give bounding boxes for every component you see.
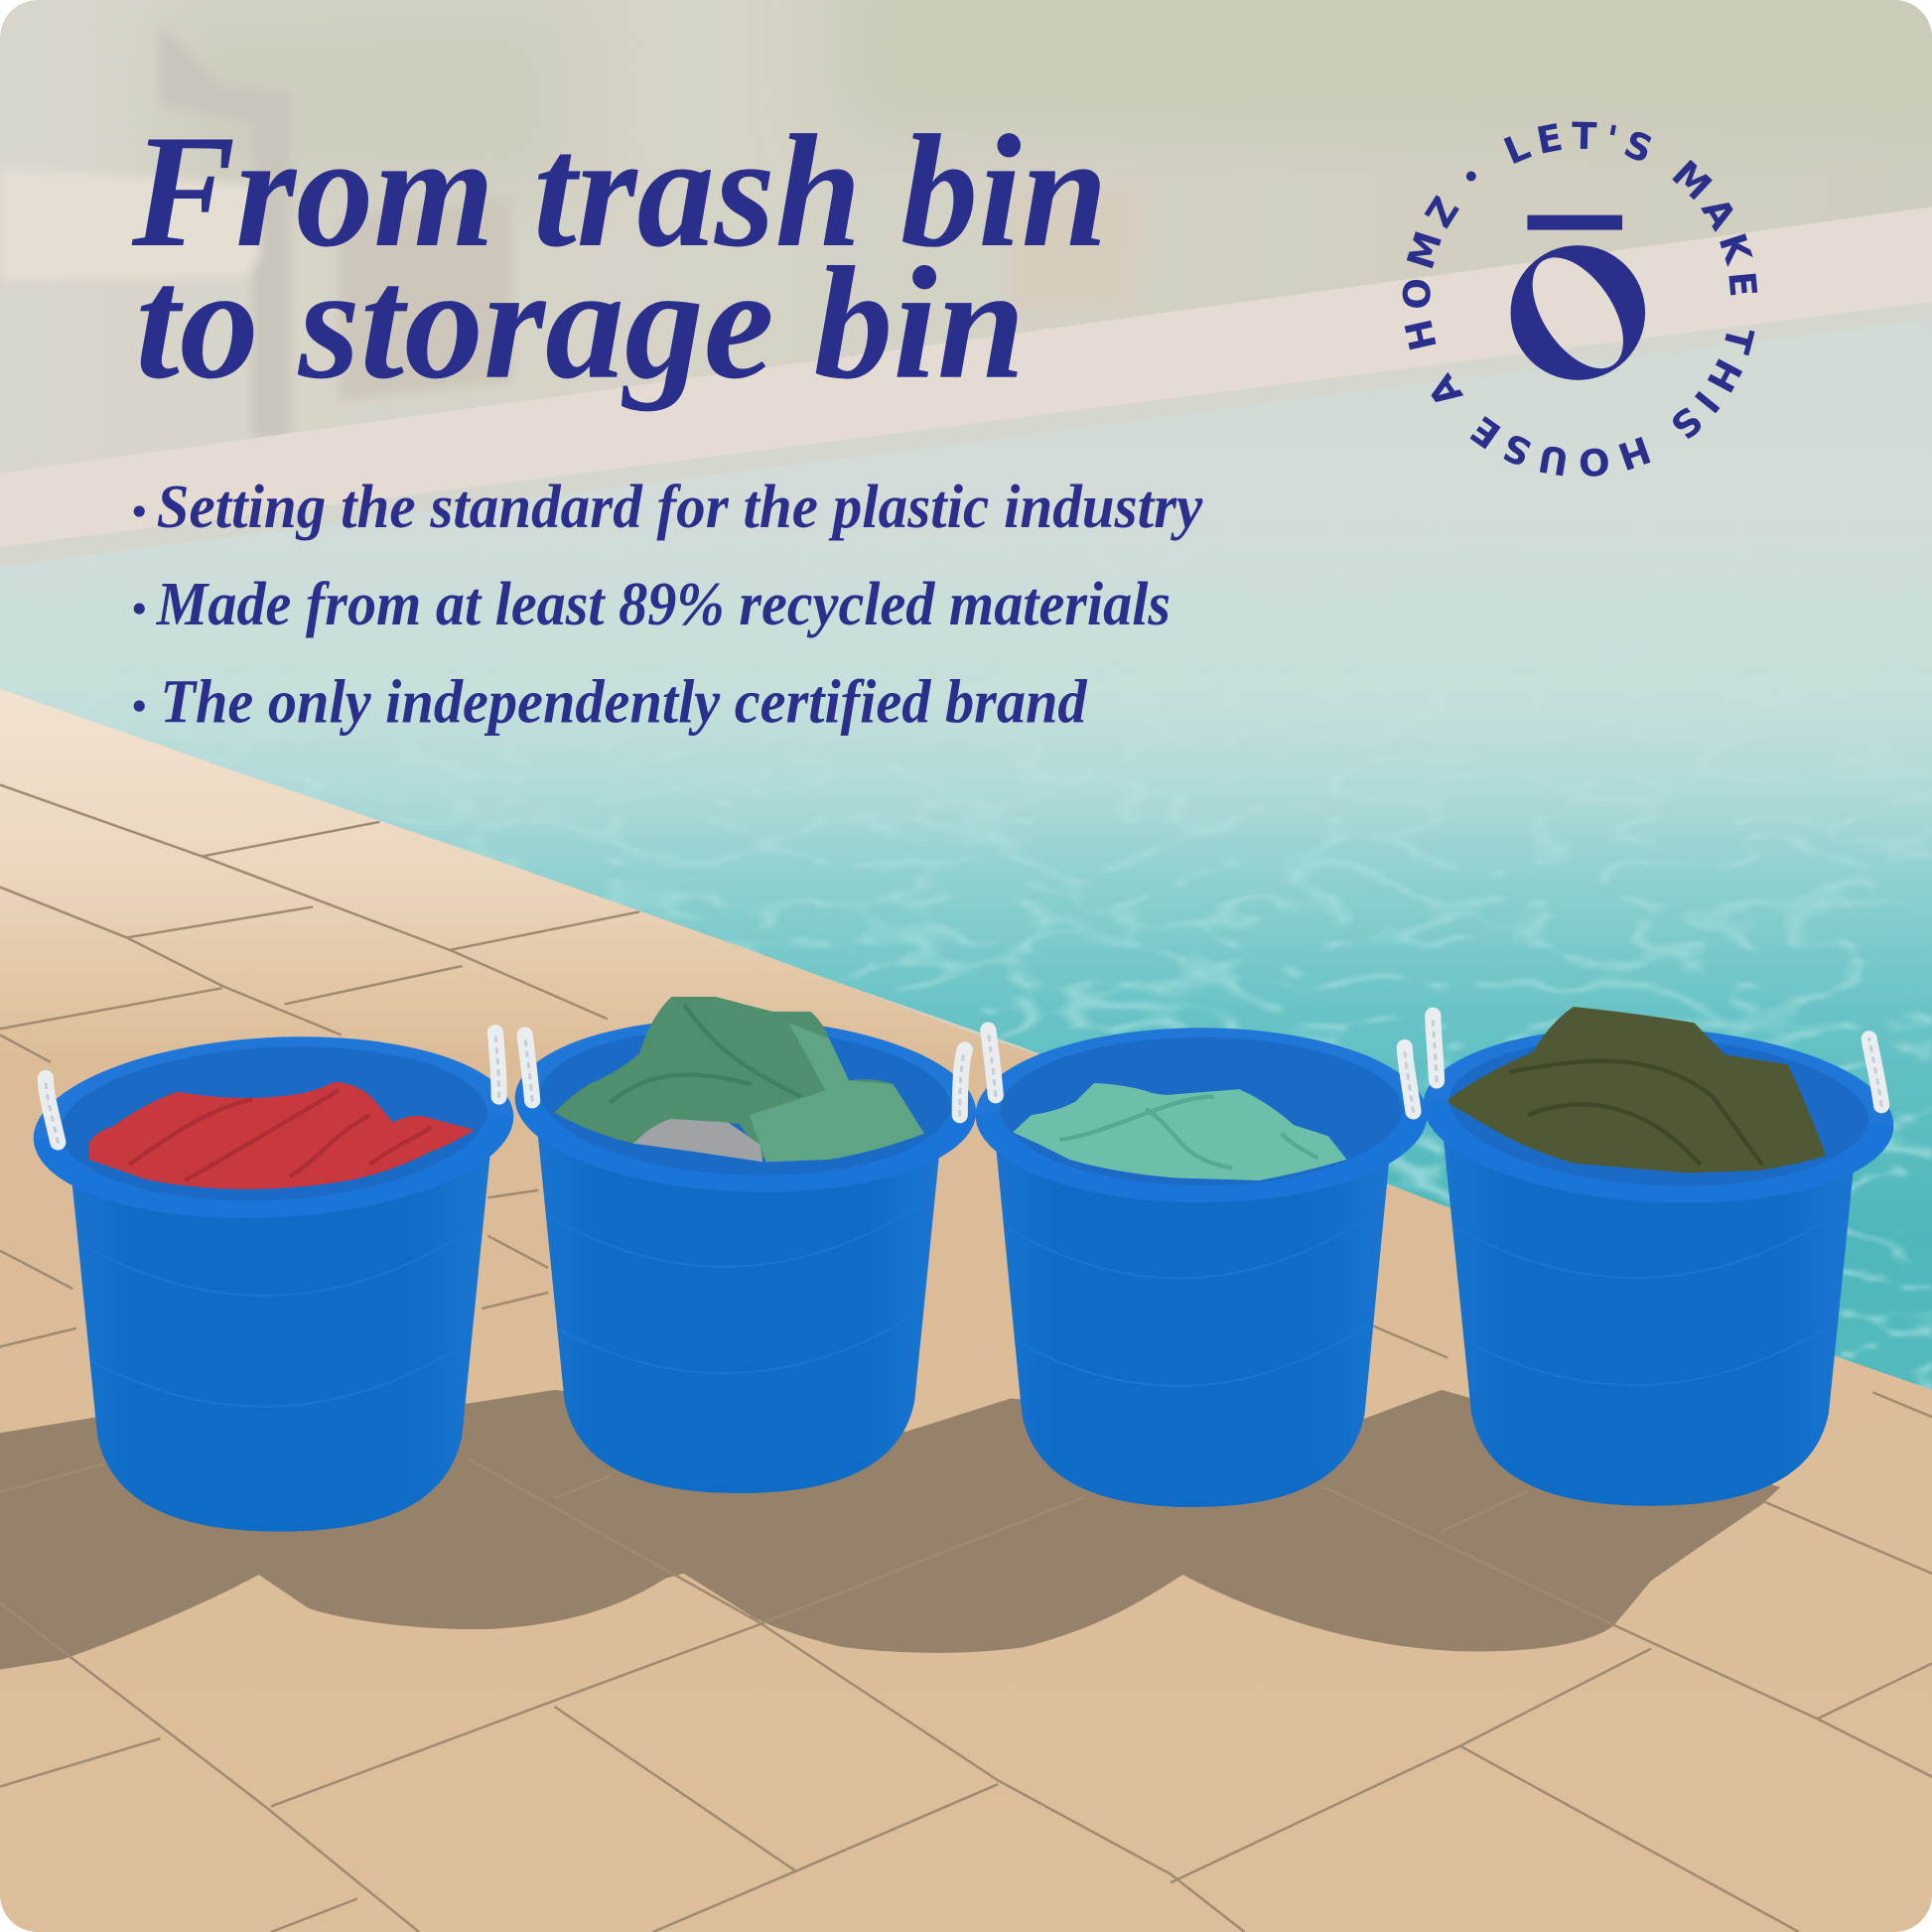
logo badge (1402, 121, 1757, 477)
circular slogan: LET'S MAKE THIS HOUSE A HOMZ (1402, 121, 1757, 477)
rope handles (46, 1033, 499, 1142)
bullet list: The only independently certified brand (160, 668, 1088, 736)
bin 1: red cloth (29, 1025, 518, 1532)
rope handles (525, 1035, 965, 1115)
bullet list: Setting the standard for the plastic industry (157, 474, 1203, 541)
paving joints (0, 785, 1932, 1932)
macron bar (1527, 215, 1622, 230)
bullet list (134, 474, 1203, 736)
bin 3: mint cloth (976, 1028, 1428, 1507)
rope handles (1433, 1016, 1881, 1105)
red cloth (88, 1082, 475, 1189)
mint cloth (1013, 1083, 1346, 1180)
olive cloth (1446, 1007, 1826, 1173)
grey cloth (633, 1119, 762, 1162)
title (131, 102, 1108, 413)
slogan dot (1466, 172, 1476, 181)
title: to storage bin (136, 234, 1026, 413)
title: From trash bin (131, 102, 1108, 281)
bullet list: Made from at least 89% recycled materials (156, 571, 1171, 638)
rope handles (988, 1031, 1414, 1111)
bin 2: green cloth (512, 997, 979, 1493)
logo letter o (1511, 245, 1645, 380)
deck shadow (0, 1390, 1780, 1670)
green cloth (554, 997, 924, 1162)
bin 4: olive cloth (1419, 1007, 1898, 1506)
